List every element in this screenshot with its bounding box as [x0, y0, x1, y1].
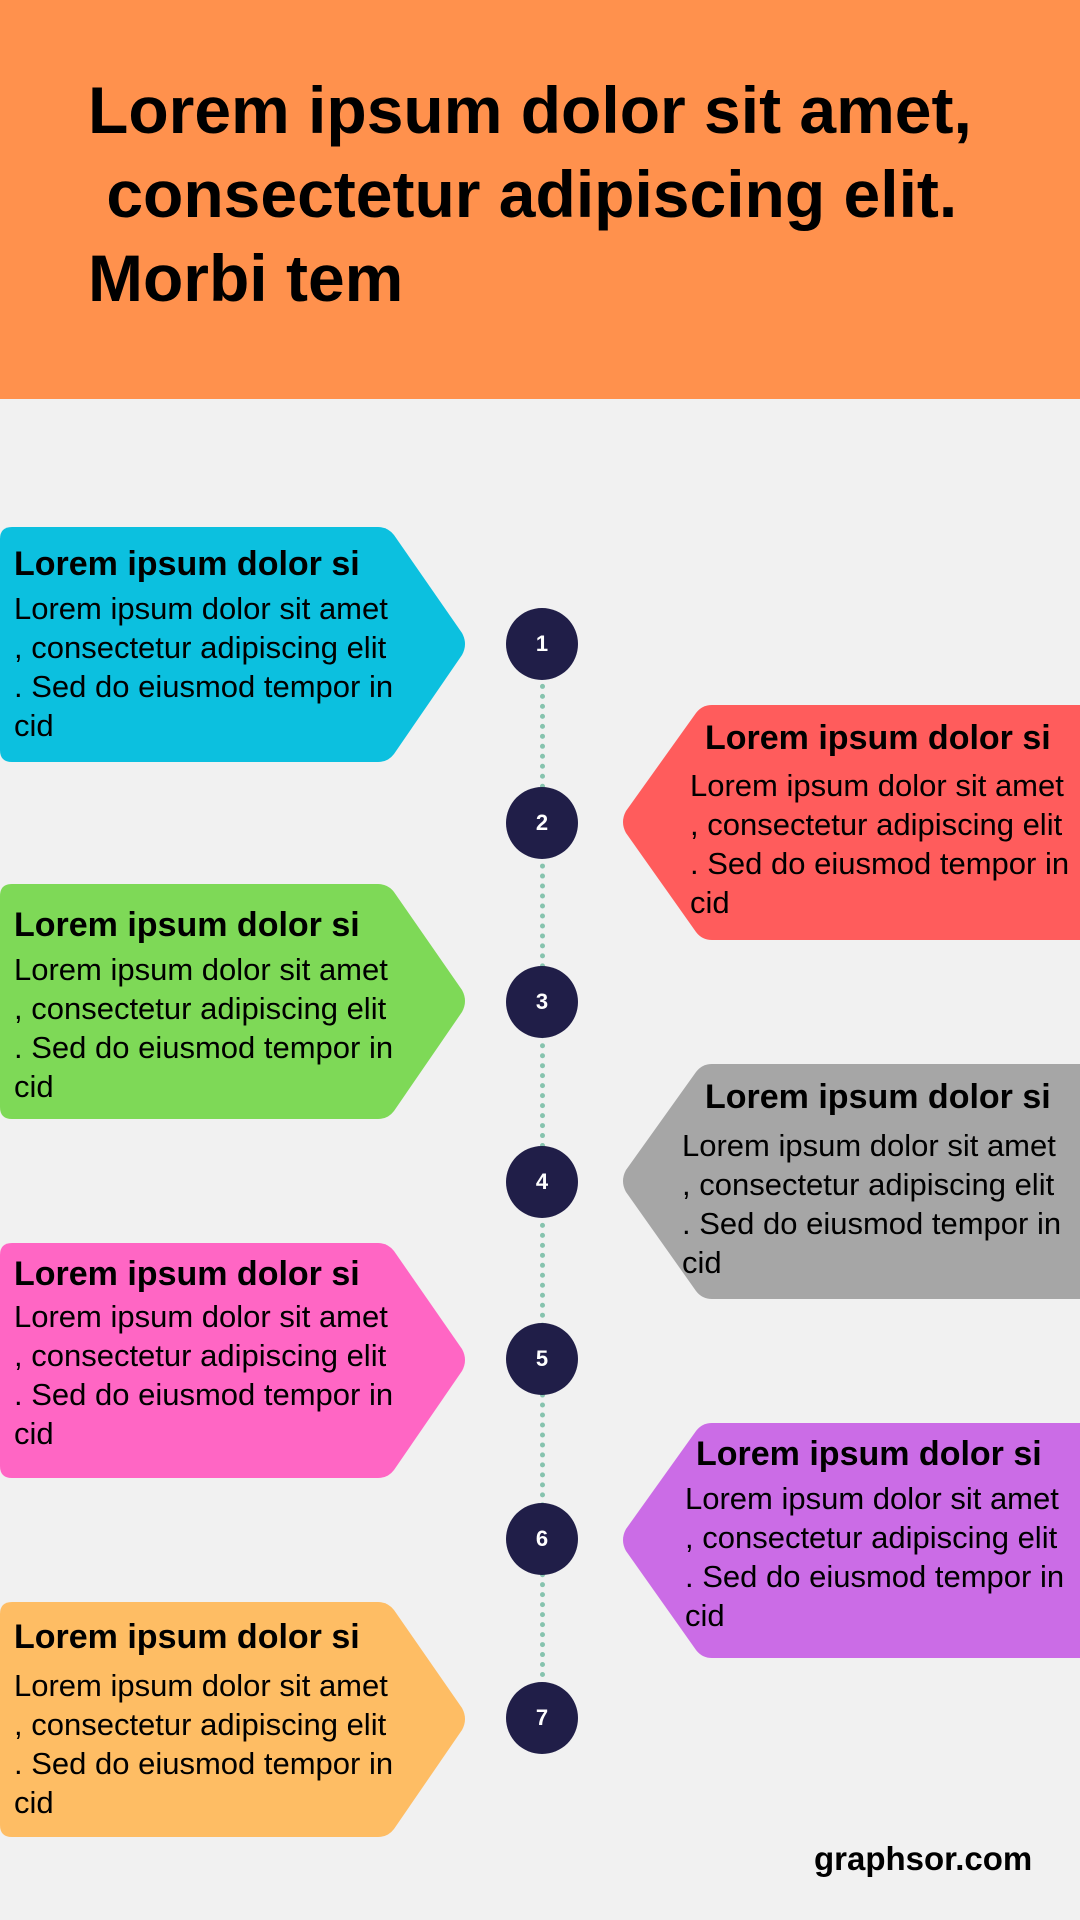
- text: 7: [536, 1705, 548, 1730]
- panel: step 5: [0, 1243, 465, 1478]
- text: 6: [536, 1526, 548, 1551]
- panel: step 4: [623, 1064, 1080, 1299]
- panel: step 2: , consectetur adipiscing elit: [690, 807, 1062, 842]
- header banner: [0, 0, 1080, 399]
- text: 3: [536, 989, 548, 1014]
- panel: step 4: , consectetur adipiscing elit: [682, 1167, 1054, 1202]
- panel: step 3: , consectetur adipiscing elit: [14, 991, 386, 1026]
- panel: step 3: . Sed do eiusmod tempor in: [14, 1030, 393, 1065]
- panel: step 2: Lorem ipsum dolor si: [705, 719, 1051, 757]
- panel: step 1: cid: [14, 708, 54, 743]
- text: 5: [536, 1346, 548, 1371]
- panel: step 5: Lorem ipsum dolor si: [14, 1255, 360, 1293]
- panel: step 4: Lorem ipsum dolor si: [705, 1078, 1051, 1116]
- panel: step 6: cid: [685, 1598, 725, 1633]
- panel: step 7: [0, 1602, 465, 1837]
- panel: step 1: . Sed do eiusmod tempor in: [14, 669, 393, 704]
- panel: step 7: cid: [14, 1785, 54, 1820]
- footer brand: graphsor.com: [814, 1840, 1032, 1877]
- panel: step 7: , consectetur adipiscing elit: [14, 1707, 386, 1742]
- text: 4: [536, 1169, 548, 1194]
- panel: step 2: [623, 705, 1080, 940]
- timeline dotted line: [540, 644, 545, 1718]
- panel: step 5: . Sed do eiusmod tempor in: [14, 1377, 393, 1412]
- title: [88, 73, 972, 315]
- panel: step 4: Lorem ipsum dolor sit amet: [682, 1128, 1056, 1163]
- title: Morbi tem: [88, 241, 403, 315]
- panel: step 4: cid: [682, 1245, 722, 1280]
- panel: step 3: Lorem ipsum dolor si: [14, 906, 360, 944]
- panel: step 7: . Sed do eiusmod tempor in: [14, 1746, 393, 1781]
- panel: step 6: Lorem ipsum dolor sit amet: [685, 1481, 1059, 1516]
- panel: step 5: cid: [14, 1416, 54, 1451]
- title: consectetur adipiscing elit.: [106, 157, 957, 231]
- panel: step 6: [623, 1423, 1080, 1658]
- panel: step 6: Lorem ipsum dolor si: [696, 1435, 1042, 1473]
- text: 2: [536, 810, 548, 835]
- panel: step 5: Lorem ipsum dolor sit amet: [14, 1299, 388, 1334]
- text: 1: [536, 631, 548, 656]
- panel: step 1: [0, 527, 465, 762]
- panel: step 5: , consectetur adipiscing elit: [14, 1338, 386, 1373]
- panel: step 2: Lorem ipsum dolor sit amet: [690, 768, 1064, 803]
- panel: step 2: . Sed do eiusmod tempor in: [690, 846, 1069, 881]
- panel: step 7: Lorem ipsum dolor si: [14, 1618, 360, 1656]
- panel: step 1: Lorem ipsum dolor si: [14, 545, 360, 583]
- panel: step 3: cid: [14, 1069, 54, 1104]
- panel: step 7: Lorem ipsum dolor sit amet: [14, 1668, 388, 1703]
- panel: step 1: Lorem ipsum dolor sit amet: [14, 591, 388, 626]
- step circles: [506, 608, 578, 1754]
- panel: step 6: . Sed do eiusmod tempor in: [685, 1559, 1064, 1594]
- title: Lorem ipsum dolor sit amet,: [88, 73, 972, 147]
- panel: step 2: cid: [690, 885, 730, 920]
- panel: step 3: [0, 884, 465, 1119]
- panel: step 3: Lorem ipsum dolor sit amet: [14, 952, 388, 987]
- panel: step 6: , consectetur adipiscing elit: [685, 1520, 1057, 1555]
- panel: step 1: , consectetur adipiscing elit: [14, 630, 386, 665]
- panel: step 4: . Sed do eiusmod tempor in: [682, 1206, 1061, 1241]
